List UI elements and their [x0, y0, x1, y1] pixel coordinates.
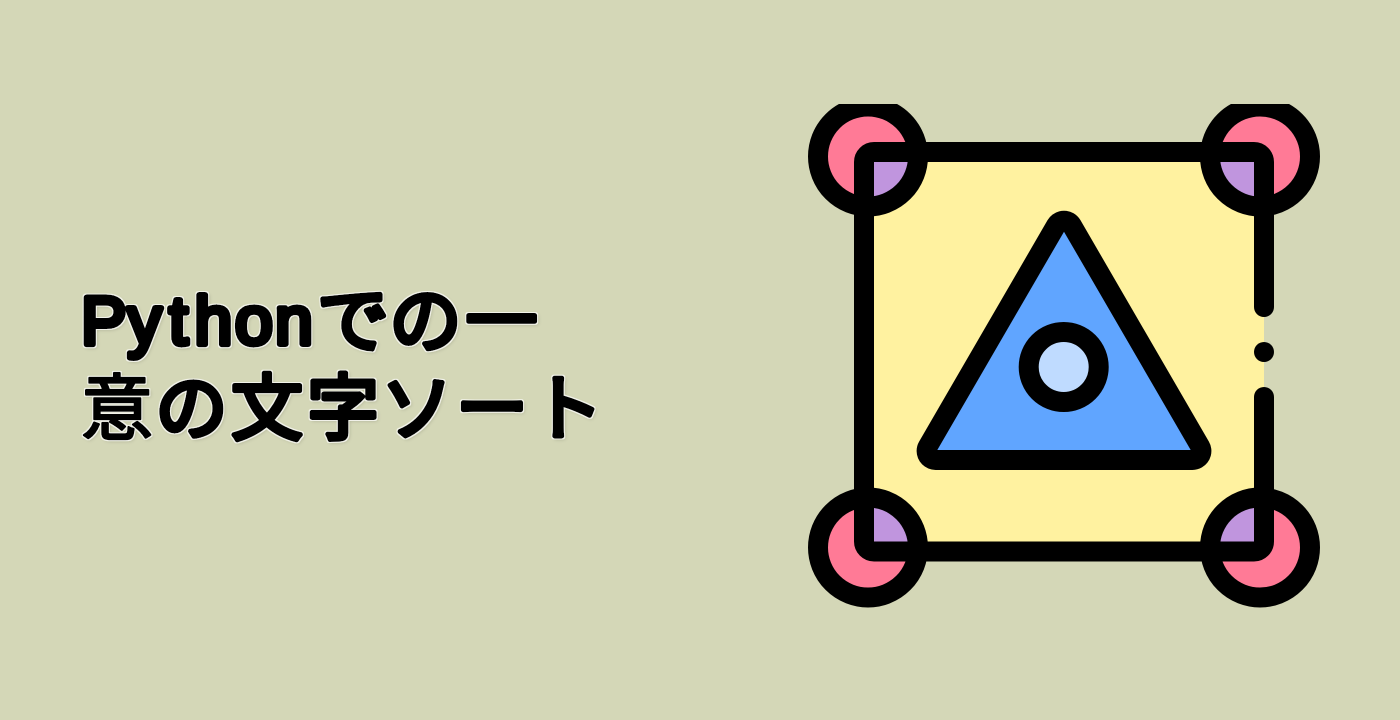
title line 1 [81, 282, 538, 362]
title line 2: 意 [81, 370, 153, 450]
corner node fills [818, 106, 1310, 598]
triangle [936, 230, 1192, 451]
gap dot [1254, 342, 1274, 362]
square outline with gap [864, 152, 1264, 552]
title [81, 282, 603, 450]
title line 1: での一 [317, 282, 538, 362]
infographic canvas [82, 104, 1320, 608]
title line 2: の文字ソート [156, 370, 603, 450]
triangle centre circle [1029, 332, 1099, 402]
square fill [864, 152, 1264, 552]
corner node outlines [818, 106, 1310, 598]
icon: square with triangle and corner nodes [818, 106, 1310, 598]
title line 1: Python [81, 283, 313, 359]
corner node overlaps [874, 162, 1254, 542]
